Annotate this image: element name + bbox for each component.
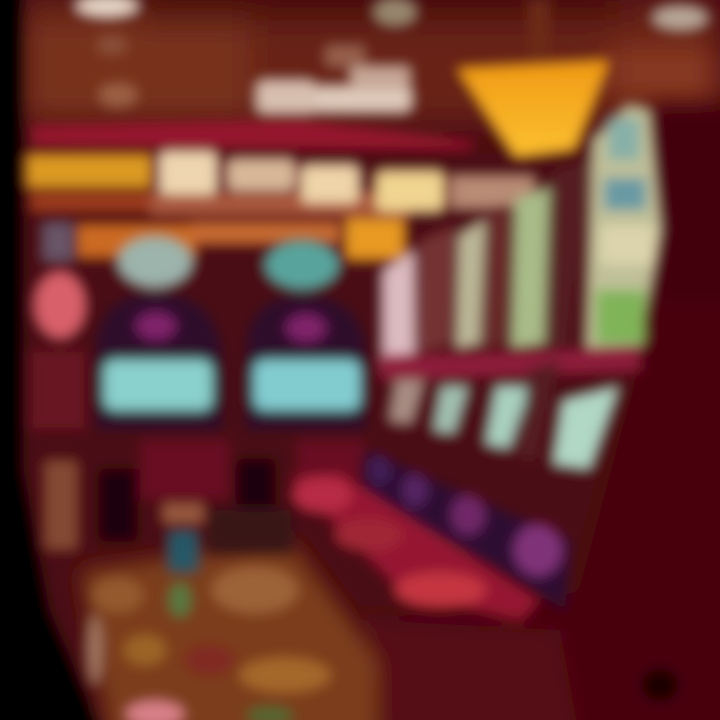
- ceiling and upper wall: [20, 0, 720, 125]
- red band: [32, 120, 472, 150]
- base cabinets: [360, 620, 580, 720]
- white marquee lettering: [158, 150, 535, 212]
- machine 2: [238, 240, 366, 510]
- side machine row: [382, 105, 662, 368]
- right dark panel: [400, 105, 720, 720]
- yellow marquee band: [26, 154, 410, 260]
- slot machine consoles: [360, 450, 570, 610]
- ceiling lights: [75, 0, 708, 107]
- carpet pattern: [87, 566, 331, 720]
- machine 1: [96, 236, 230, 540]
- left machine edge: [30, 222, 86, 550]
- dark floor spot: [642, 669, 678, 701]
- left black strip: [0, 0, 105, 720]
- side machine lower panels: [380, 347, 640, 470]
- aisle stool: [162, 502, 293, 572]
- upper sign: [256, 45, 412, 114]
- carpet: [80, 540, 380, 720]
- hanging lamp: [456, 0, 610, 158]
- red stools: [290, 472, 540, 622]
